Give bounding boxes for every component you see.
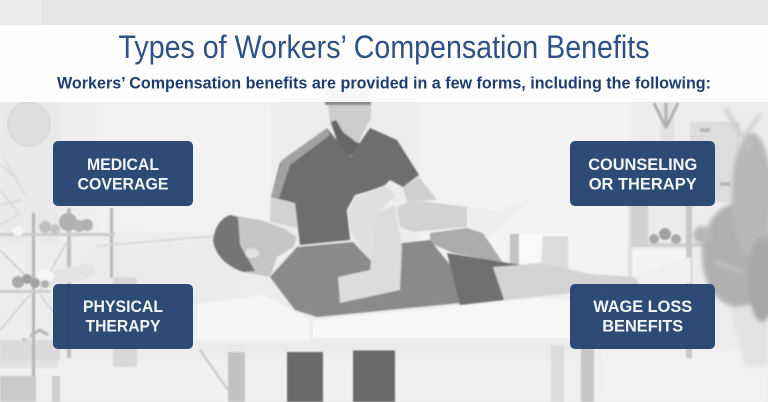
panel: wage loss benefits: BENEFITS (602, 318, 683, 336)
therapist arm near shoulder (270, 197, 298, 228)
left shelves (0, 160, 215, 402)
therapist shirt (271, 128, 419, 245)
patient straight leg (493, 256, 691, 300)
panel: physical therapy (53, 284, 193, 349)
title: Types of Workers’ Compensation Benefits (118, 29, 650, 65)
patient arms and hands (347, 185, 395, 263)
panel: counseling or therapy (570, 141, 715, 206)
panel: counseling or therapy: OR THERAPY (589, 176, 697, 194)
potted plant (693, 108, 768, 367)
patient shirt (270, 240, 460, 317)
panel: physical therapy: THERAPY (86, 318, 160, 336)
patient shorts (447, 253, 520, 305)
therapist legs (287, 352, 323, 402)
therapist (270, 81, 437, 402)
panel: medical coverage: MEDICAL (87, 156, 159, 174)
therapist head (326, 81, 371, 146)
panel: wage loss benefits (570, 284, 715, 349)
patient head (213, 215, 297, 277)
panel: counseling or therapy: COUNSELING (588, 156, 697, 174)
subtitle: Workers’ Compensation benefits are provided in a few forms, including the following: (57, 74, 711, 92)
header band (0, 25, 768, 102)
right shelves, vase and dumbbells (510, 102, 740, 358)
wall clock (8, 102, 50, 146)
panel: medical coverage (53, 141, 193, 206)
treatment table (196, 295, 594, 402)
patient thigh and foot (397, 200, 467, 232)
patient (213, 185, 691, 317)
panel: physical therapy: PHYSICAL (83, 298, 163, 316)
panel: medical coverage: COVERAGE (78, 176, 168, 194)
panel: wage loss benefits: WAGE LOSS (593, 298, 692, 316)
patient back leg (430, 228, 503, 263)
